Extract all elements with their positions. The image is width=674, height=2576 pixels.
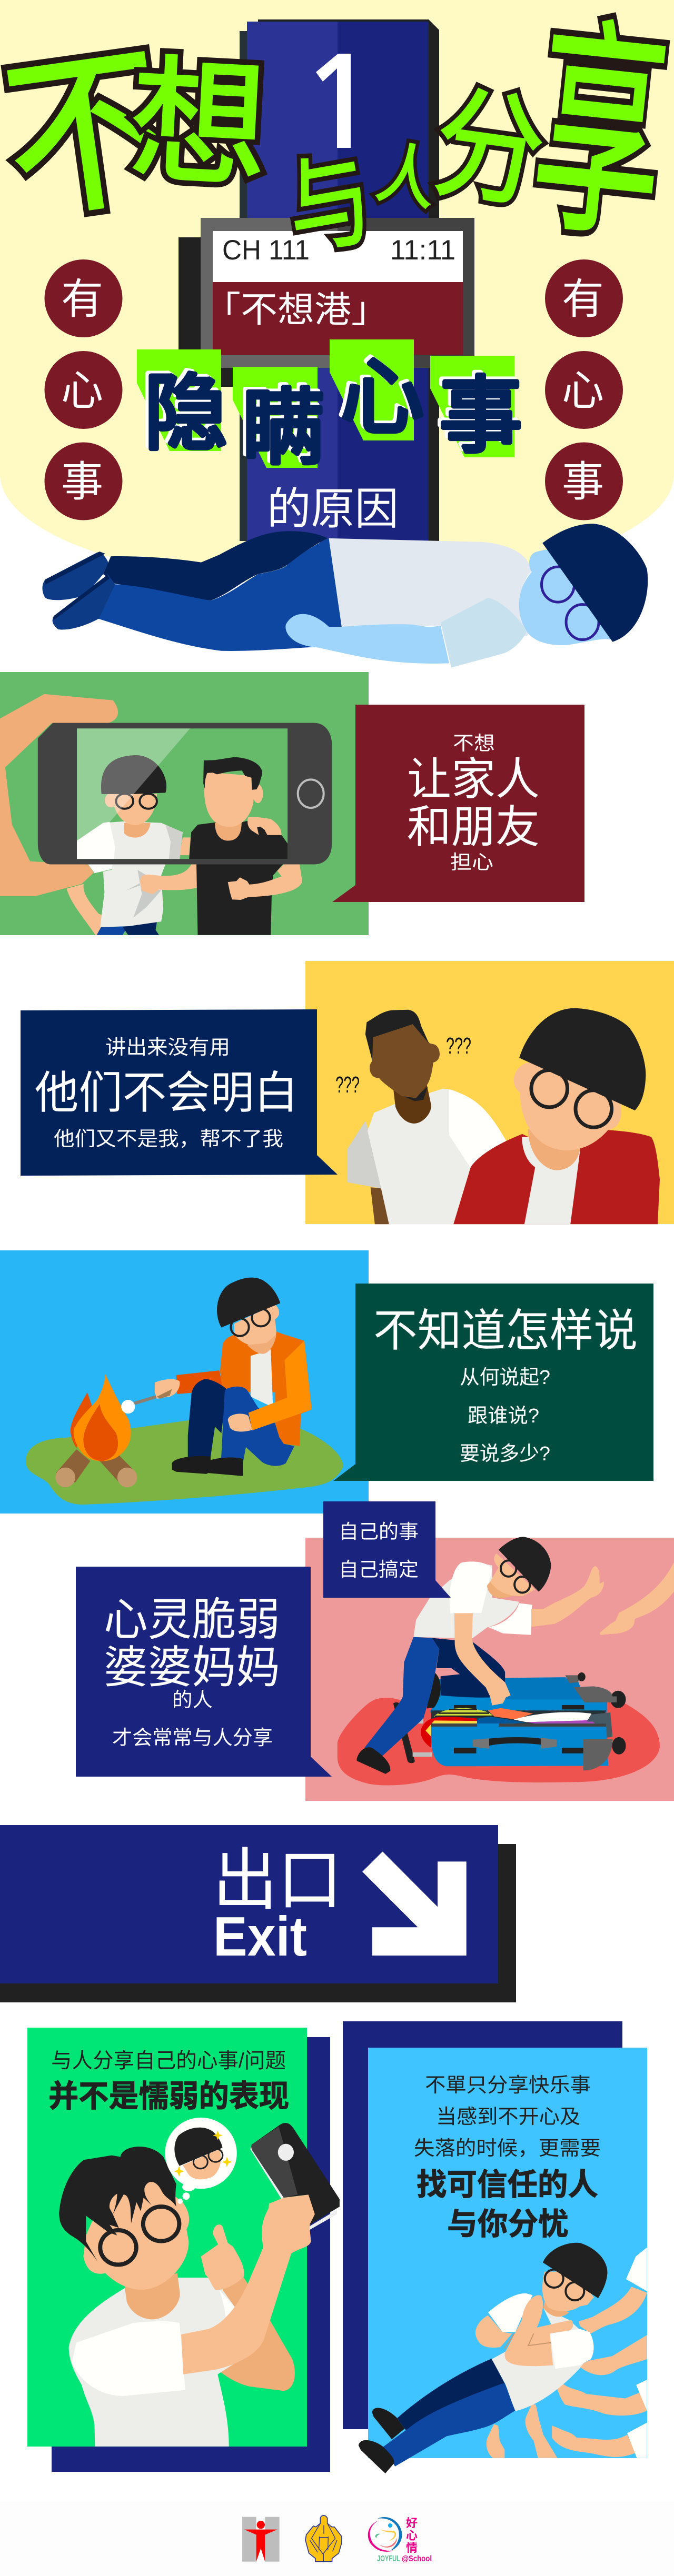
blue background bbox=[0, 1250, 369, 1513]
side badges right: 有心事: 有 bbox=[562, 276, 604, 323]
callout: they won't understand: 讲出来没有用 bbox=[105, 1037, 230, 1059]
illustration: two men bbox=[348, 1008, 660, 1224]
callout: they won't understand bbox=[21, 1009, 338, 1176]
title: 不想与人分享: 享 bbox=[523, 1, 674, 267]
callout: they won't understand: 他们又不是我，帮不了我 bbox=[54, 1128, 283, 1150]
callout: don't know how to say: 从何说起? bbox=[460, 1367, 550, 1389]
subtitle tags: 隐瞒心事: 隐 bbox=[141, 365, 224, 457]
pink background bbox=[305, 1538, 674, 1801]
callout: worry: 担心 bbox=[450, 851, 493, 873]
callout: don't know how to say bbox=[333, 1284, 653, 1481]
sign shadow bbox=[0, 1844, 516, 2002]
title: 不想与人分享: 想 bbox=[126, 45, 271, 205]
callout: fragile people bbox=[76, 1567, 332, 1777]
callout: fragile people: 心灵脆弱 bbox=[104, 1595, 280, 1645]
panel: fragile people share bbox=[76, 1501, 674, 1801]
subtitle tags: 隐瞒心事: 事 bbox=[439, 370, 522, 463]
callout: worry: 和朋友 bbox=[407, 803, 540, 853]
question marks: ??? bbox=[446, 1033, 471, 1059]
illustration: man taking selfie bbox=[59, 2118, 340, 2447]
title: 不想与人分享: 与 bbox=[279, 139, 380, 269]
logo: Joyful at School: JOYFUL bbox=[377, 2554, 400, 2563]
text: find someone you trust: 失落的时候，更需要 bbox=[414, 2138, 601, 2160]
side badges right: 有心事: 事 bbox=[562, 458, 604, 505]
side badges left: 有心事: 事 bbox=[61, 458, 103, 505]
callout: sort it out yourself: 自己的事 bbox=[339, 1521, 419, 1542]
question marks: ??? bbox=[335, 1072, 360, 1098]
side badges right: 有心事 bbox=[545, 259, 623, 520]
callout: don't know how to say: 不知道怎样说 bbox=[373, 1306, 638, 1356]
subtitle tags: 隐瞒心事: 心 bbox=[341, 352, 424, 444]
title: 不想与人分享: 享 bbox=[523, 1, 674, 267]
text: find someone you trust: 找可信任的人 bbox=[417, 2168, 598, 2202]
logo: Joyful at School bbox=[368, 2517, 432, 2563]
callout: worry bbox=[332, 705, 584, 902]
callout: they won't understand: 他们不会明白 bbox=[35, 1068, 298, 1118]
subtitle tags: 隐瞒心事 bbox=[137, 339, 522, 475]
subtitle: 的原因: 的原因 bbox=[267, 484, 399, 534]
title: 不想与人分享: 分 bbox=[427, 74, 552, 224]
callout: don't know how to say: 跟谁说? bbox=[468, 1405, 539, 1427]
callout: fragile people: 婆婆妈妈 bbox=[104, 1643, 280, 1693]
departure sign: CH 111 bbox=[222, 235, 310, 266]
callout: sort it out yourself bbox=[323, 1501, 451, 1598]
panel: find someone you trust bbox=[343, 2021, 647, 2473]
callout: don't know how to say: 要说多少? bbox=[460, 1443, 550, 1465]
sign plate bbox=[0, 1825, 498, 1983]
header yellow background bbox=[0, 0, 674, 586]
footer logos bbox=[0, 2501, 674, 2576]
title: 不想与人分享: 分 bbox=[427, 74, 552, 224]
departure sign: 11:11 bbox=[390, 235, 455, 266]
subtitle tags: 隐瞒心事: 事 bbox=[436, 367, 519, 460]
sign text: 出口: 出口 bbox=[213, 1843, 342, 1918]
text: find someone you trust bbox=[414, 2074, 601, 2241]
title: 不想与人分享: 人 bbox=[372, 135, 442, 218]
callout: sort it out yourself: 自己搞定 bbox=[339, 1559, 419, 1580]
subtitle tags: 隐瞒心事: 瞒 bbox=[242, 382, 325, 475]
platform tower bbox=[240, 19, 439, 543]
title: 不想与人分享: 与 bbox=[279, 139, 380, 269]
text: find someone you trust: 与你分忧 bbox=[447, 2207, 569, 2241]
logo: Joyful at School: 心 bbox=[406, 2529, 418, 2542]
side badges left: 有心事: 有 bbox=[61, 276, 103, 323]
illustration: man lying down bbox=[42, 524, 648, 668]
green card bbox=[27, 2028, 307, 2447]
title: 不想与人分享: 想 bbox=[126, 45, 271, 205]
panel: don't know how to say bbox=[0, 1250, 653, 1513]
text: sharing is not weakness: 并不是懦弱的表现 bbox=[48, 2079, 289, 2113]
panel: worry family and friends bbox=[0, 672, 584, 935]
text: find someone you trust: 当感到不开心及 bbox=[436, 2106, 580, 2128]
side badges left: 有心事: 心 bbox=[61, 367, 103, 414]
callout: worry: 不想 bbox=[453, 733, 495, 754]
illustration: man caught by many hands bbox=[359, 2243, 647, 2473]
text: sharing is not weakness bbox=[48, 2049, 289, 2113]
text: find someone you trust: 不單只分享快乐事 bbox=[425, 2074, 591, 2097]
logo: Joyful at School: 情 bbox=[406, 2541, 418, 2554]
illustration: man closing suitcase bbox=[338, 1537, 674, 1786]
callout: fragile people: 才会常常与人分享 bbox=[112, 1727, 273, 1749]
question marks bbox=[335, 1033, 471, 1098]
subtitle tags: 隐瞒心事: 心 bbox=[338, 349, 421, 442]
side badges left: 有心事 bbox=[44, 259, 122, 520]
arrow bbox=[362, 1851, 467, 1956]
callout: fragile people: 的人 bbox=[172, 1689, 213, 1711]
logo: hands holding figure bbox=[305, 2515, 342, 2562]
side badges right: 有心事: 心 bbox=[562, 367, 604, 414]
number 1 bbox=[316, 54, 351, 148]
yellow background bbox=[305, 961, 674, 1224]
blue card bbox=[368, 2048, 647, 2458]
callout: worry: 让家人 bbox=[407, 755, 540, 805]
illustration: man at campfire bbox=[26, 1278, 343, 1505]
green background bbox=[0, 672, 369, 935]
subtitle tags: 隐瞒心事: 瞒 bbox=[239, 379, 322, 472]
panel: sharing is not weakness bbox=[27, 2028, 340, 2472]
navy backing bbox=[52, 2037, 330, 2472]
logo: Joyful at School: 好 bbox=[406, 2517, 418, 2530]
departure sign: 「不想港」 bbox=[204, 290, 388, 330]
text: sharing is not weakness: 与人分享自己的心事/问题 bbox=[51, 2049, 286, 2072]
panel: exit sign bbox=[0, 1825, 516, 2002]
panel: header bbox=[0, 0, 674, 668]
illustration: selfie on phone bbox=[0, 694, 332, 935]
panel: they won't understand bbox=[21, 961, 674, 1224]
logo: department of health bbox=[242, 2517, 280, 2562]
title: 不想与人分享: 人 bbox=[372, 135, 442, 218]
subtitle tags: 隐瞒心事: 隐 bbox=[144, 367, 227, 460]
departure sign bbox=[179, 218, 474, 387]
navy backing bbox=[343, 2021, 622, 2429]
title: 不想与人分享 bbox=[0, 1, 674, 269]
sign text: Exit: Exit bbox=[213, 1906, 307, 1968]
logo: Joyful at School: @School bbox=[402, 2554, 432, 2563]
